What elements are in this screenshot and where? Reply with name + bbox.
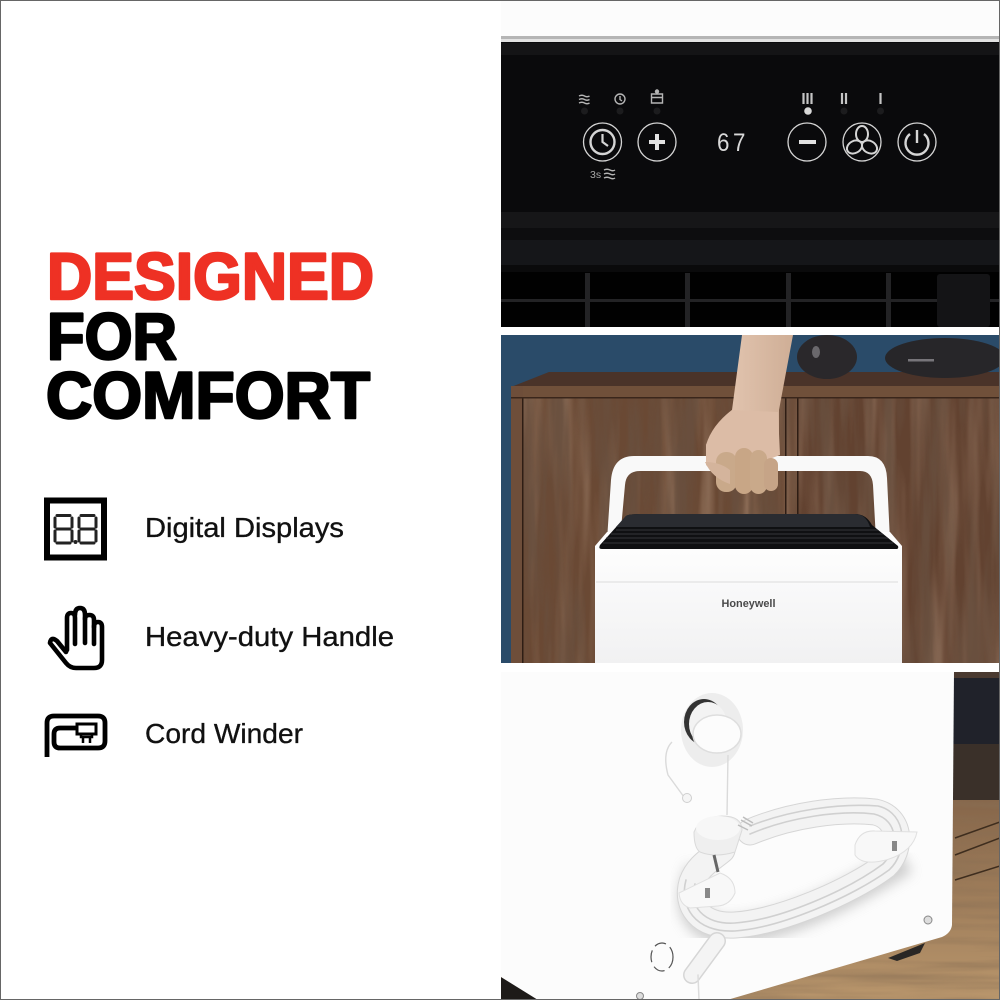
cord hook: left (679, 873, 735, 908)
screw (924, 916, 932, 924)
dehumidifier unit (595, 514, 902, 663)
blue wall (501, 335, 1000, 663)
background floor (500, 672, 1000, 1000)
vent bars (501, 273, 1000, 327)
wood cabinet (511, 372, 1000, 663)
drain port (666, 693, 743, 815)
heading line: DESIGNED: DESIGNED (47, 239, 374, 313)
button: minus (788, 123, 826, 161)
feature: heavy-duty handle (50, 608, 394, 668)
cord hook: right (855, 831, 917, 862)
lower screw (636, 992, 644, 1000)
indicator: display reading: 67 (717, 129, 749, 157)
icon: digital display (47, 500, 104, 558)
handle (607, 456, 890, 540)
unit body (501, 672, 954, 1000)
heading line: COMFORT: COMFORT (46, 358, 370, 432)
vase (797, 335, 857, 379)
photo panel: cord winder close-up (500, 672, 1000, 1000)
brand label: Honeywell (722, 598, 776, 610)
indicator icons (579, 90, 880, 179)
label: 3s: 3s (590, 169, 601, 181)
control buttons (584, 123, 936, 161)
icon: hand (50, 608, 102, 668)
stone (885, 338, 1000, 378)
wheel (888, 943, 925, 961)
feature: cord winder (47, 716, 303, 757)
icon: cord winder (47, 716, 105, 757)
arm and hand (705, 335, 793, 494)
button: plus (638, 123, 676, 161)
button: fan (843, 123, 881, 161)
label: Heavy-duty Handle: Heavy-duty Handle (145, 621, 394, 652)
photo panel: carrying by handle (501, 335, 1000, 663)
label: Digital Displays: Digital Displays (145, 512, 344, 543)
feature: digital displays (47, 500, 344, 558)
plug (694, 816, 753, 872)
label: Cord Winder: Cord Winder (145, 718, 303, 749)
button: power (898, 123, 936, 161)
cord coil (684, 805, 902, 1000)
round knockout (651, 943, 673, 971)
photo panel: control panel (501, 36, 999, 327)
heading line: FOR: FOR (47, 299, 177, 373)
indicator dots (581, 107, 884, 115)
heading (46, 239, 374, 432)
cord coil shadow (692, 860, 905, 931)
button: timer (584, 123, 622, 161)
